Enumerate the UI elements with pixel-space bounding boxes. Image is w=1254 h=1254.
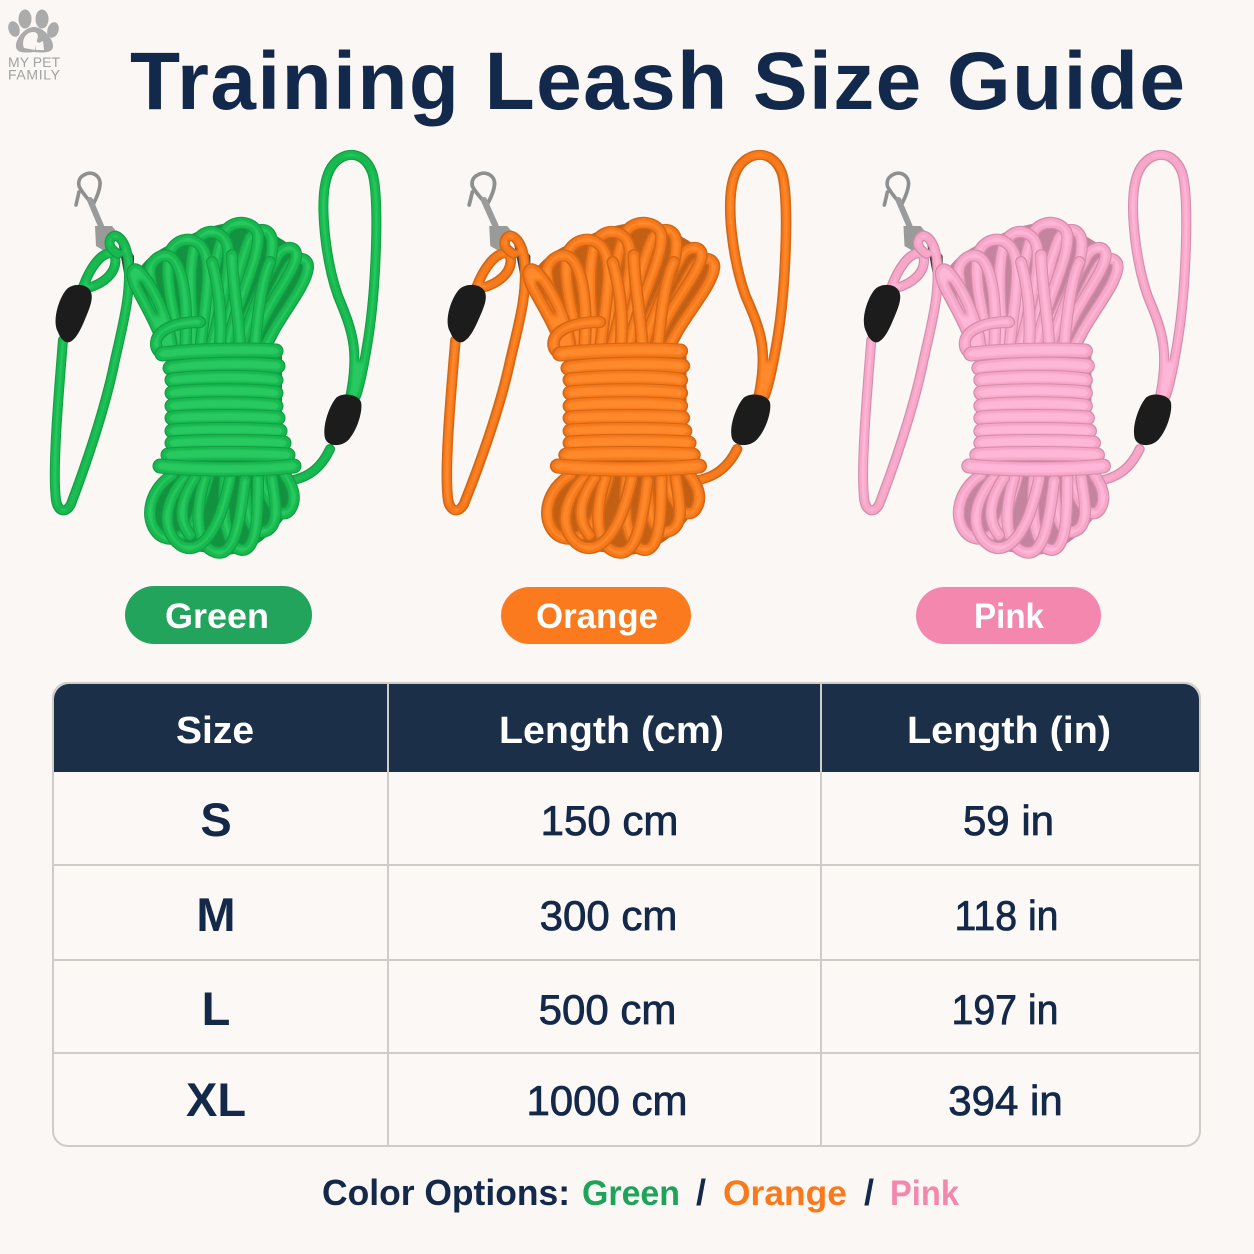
logo text: FAMILY [8, 66, 61, 82]
icon: paw with dog and cat [6, 10, 61, 52]
color options footer [322, 1172, 959, 1213]
color options footer: / [696, 1172, 706, 1213]
pill: Green [125, 586, 312, 644]
leash: orange [447, 155, 786, 555]
row S: 59 in [963, 797, 1054, 844]
row S: 150 cm [541, 797, 678, 844]
title: Training Leash Size Guide [130, 36, 1185, 127]
color options footer: Orange [723, 1174, 847, 1213]
color options footer: / [864, 1172, 874, 1213]
row M: M [196, 888, 236, 941]
row XL: 1000 cm [526, 1077, 688, 1124]
pill: Pink [916, 587, 1101, 644]
row XL: XL [186, 1073, 246, 1126]
pill: Green: Green [165, 597, 269, 636]
size table [53, 683, 1200, 1146]
row S [200, 793, 1054, 846]
logo text: MY PET [8, 54, 60, 70]
row L [202, 982, 1058, 1035]
color options footer: Pink [890, 1174, 959, 1213]
leash: green [55, 155, 376, 555]
row XL [186, 1073, 1063, 1126]
row M [196, 888, 1058, 941]
logo text [8, 54, 61, 82]
row L: L [202, 982, 230, 1035]
row M: 118 in [954, 892, 1058, 939]
table header: Length (in) [907, 710, 1111, 752]
table header: Length (cm) [499, 710, 724, 752]
color options footer: Color Options: [322, 1172, 570, 1213]
row XL: 394 in [948, 1077, 1063, 1124]
row L: 197 in [952, 986, 1058, 1033]
logo: My Pet Family [6, 10, 61, 82]
row S: S [200, 793, 232, 846]
row L: 500 cm [539, 986, 676, 1033]
leash: pink [863, 155, 1186, 555]
table header [54, 684, 1199, 772]
pill: Pink: Pink [974, 597, 1044, 636]
color options footer: Green [582, 1174, 680, 1213]
pill: Orange [501, 587, 691, 644]
table header: Size [176, 710, 254, 752]
pill: Orange: Orange [536, 597, 658, 636]
row M: 300 cm [540, 892, 677, 939]
